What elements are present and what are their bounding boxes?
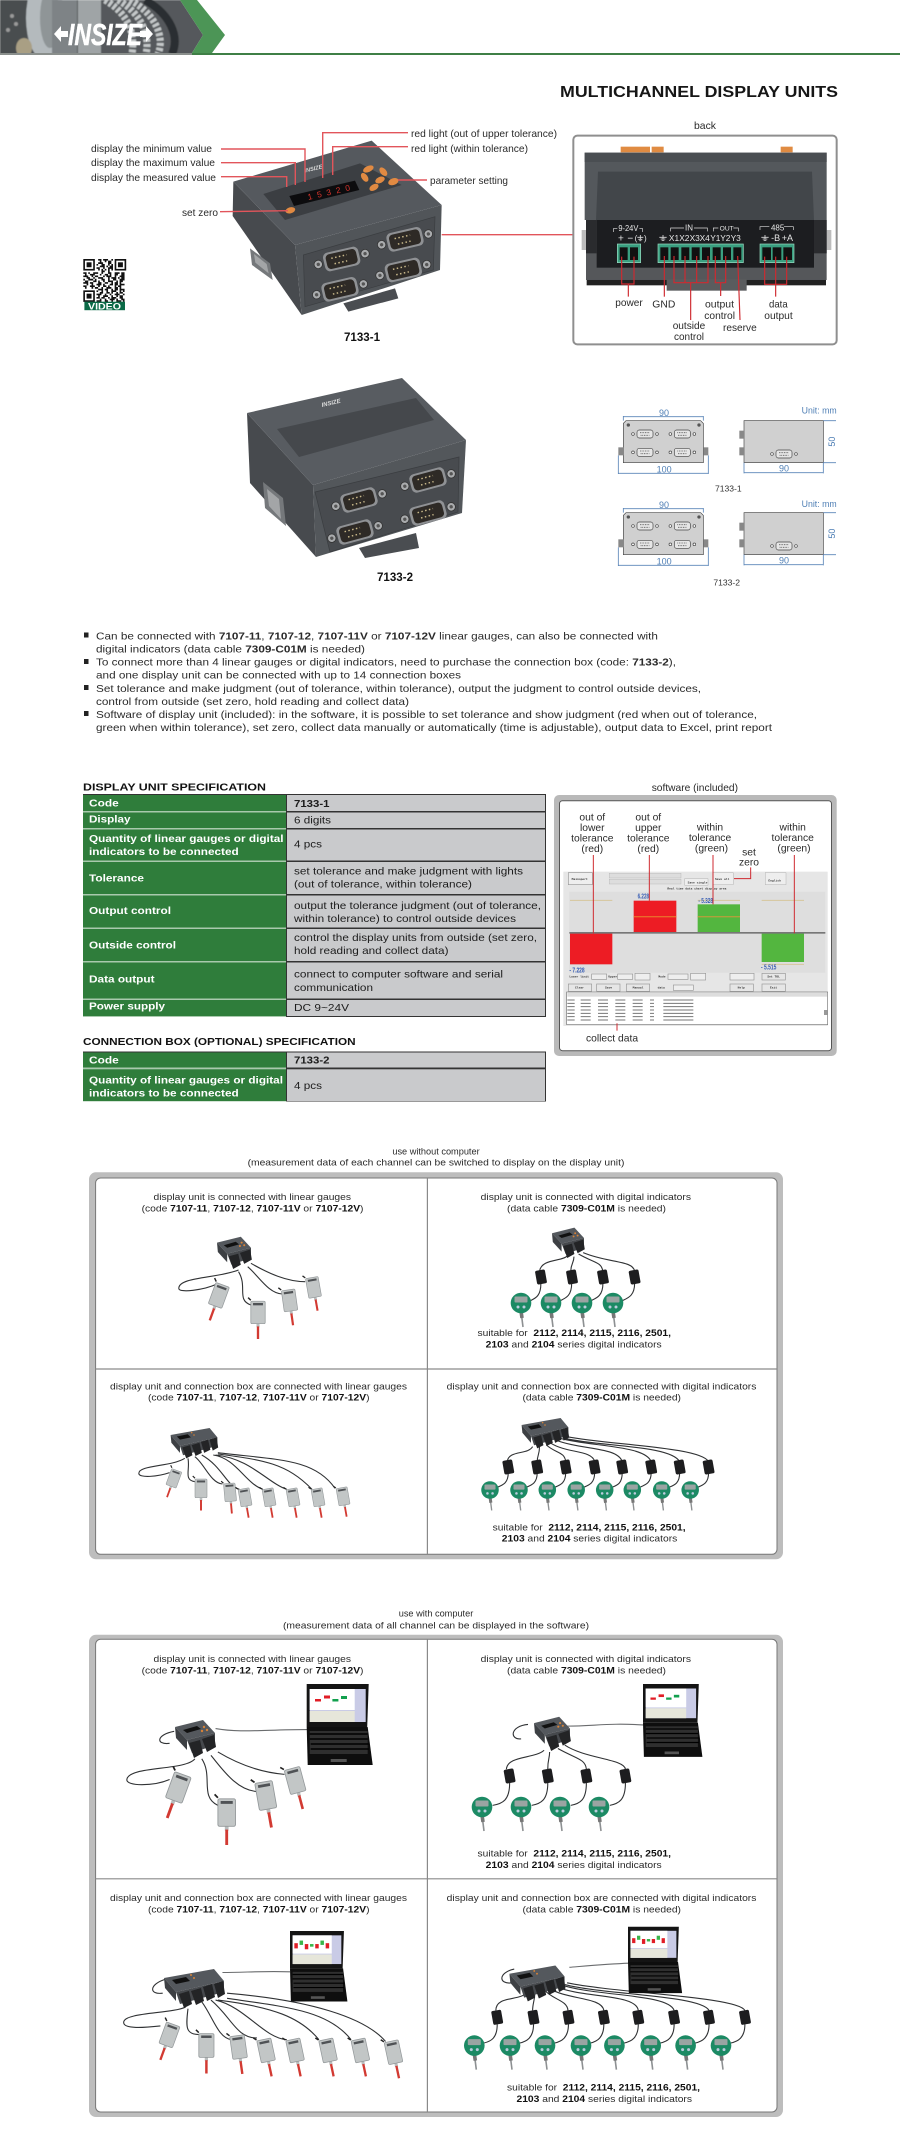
drawing set 7133-1: 50 bbox=[827, 437, 837, 447]
green rule bbox=[192, 53, 900, 55]
QR pattern bbox=[83, 260, 125, 301]
software window: Mode bbox=[658, 975, 666, 979]
software labels: (green) bbox=[777, 843, 811, 854]
row: quantity: Quantity of linear gauges or digital bbox=[89, 833, 284, 845]
callout labels for 7133-1: display the maximum value bbox=[91, 158, 215, 169]
scenario: unit and box with digital indicators: display unit and connection box are connected with digital indicators bbox=[447, 1381, 757, 1391]
scenario: computer, unit and box, linear gauges: display unit and connection box are connected with linear gauges bbox=[110, 1893, 407, 1903]
frame bbox=[89, 1635, 783, 2117]
scenario: computer, unit, digital indicators bbox=[472, 1654, 702, 1870]
drawing set 7133-2: 90 bbox=[779, 556, 789, 566]
row: output control: Output control bbox=[89, 905, 171, 917]
back view terminal labels: control bbox=[674, 332, 704, 343]
software labels: within bbox=[696, 822, 723, 833]
row: power supply: DC 9~24V bbox=[294, 1002, 349, 1014]
drawing set 7133-1: 100 bbox=[657, 464, 672, 474]
product label 7133-2: 7133-2 bbox=[377, 572, 413, 584]
scenario: unit with digital indicators: display unit is connected with digital indicators bbox=[481, 1192, 691, 1202]
connector markings: ) bbox=[644, 234, 647, 243]
row: outside control: Outside control bbox=[89, 939, 176, 951]
scenario: unit with digital indicators: 2103 and 2104 series digital indicators bbox=[486, 1339, 662, 1349]
drawing set 7133-1: 90 bbox=[779, 464, 789, 474]
callout labels for 7133-1: red light (out of upper tolerance) bbox=[411, 129, 557, 140]
connector markings: Y1 bbox=[710, 233, 721, 243]
back view terminal labels: reserve bbox=[723, 323, 757, 334]
scenario: computer, unit and box, digital indicators: display unit and connection box are connected with digital indicators bbox=[447, 1893, 757, 1903]
software labels: tolerance bbox=[772, 833, 814, 844]
software labels bbox=[571, 812, 814, 1044]
software labels: tolerance bbox=[689, 833, 731, 844]
row: code: Code bbox=[89, 1054, 119, 1066]
back view terminal labels: data bbox=[769, 300, 788, 311]
scenario: computer, unit, digital indicators: (data cable 7309-C01M is needed) bbox=[507, 1665, 666, 1675]
title: MULTICHANNEL DISPLAY UNITS bbox=[560, 84, 838, 101]
scenario: unit and box with digital indicators: suitable for 2112, 2114, 2115, 2116, 2501, bbox=[493, 1522, 686, 1532]
video tag bbox=[84, 302, 125, 310]
row: data output: Data output bbox=[89, 974, 155, 986]
software window: Save all bbox=[715, 877, 730, 881]
QR code with video tag: VIDEO bbox=[88, 302, 121, 312]
terminal blocks bbox=[617, 244, 794, 263]
drawing set 7133-2: 100 bbox=[657, 556, 672, 566]
back view terminal labels bbox=[615, 298, 793, 343]
software labels: zero bbox=[739, 857, 759, 868]
feature bullet list: Software of display unit (included): in the software, it is possible to set tolerance and show judgment (red when out of tolerance, bbox=[96, 710, 757, 721]
connector markings: 9-24V bbox=[618, 224, 639, 233]
scenario: computer, unit, digital indicators: suitable for 2112, 2114, 2115, 2116, 2501, bbox=[478, 1848, 671, 1858]
callout labels for 7133-1 bbox=[91, 129, 557, 219]
row: data output: communication bbox=[294, 982, 373, 994]
software window: 6.228 bbox=[638, 894, 649, 901]
panel: use with computer bbox=[89, 1635, 783, 2117]
row: output control: output the tolerance judgment (out of tolerance, bbox=[294, 900, 541, 912]
row: output control: within tolerance) to control outside devices bbox=[293, 913, 516, 925]
connector markings: Y3 bbox=[731, 233, 741, 243]
table: display unit specification bbox=[83, 794, 546, 1017]
software window: Save bbox=[605, 986, 612, 989]
scenario: computer, unit, digital indicators: display unit is connected with digital indicators bbox=[481, 1654, 691, 1664]
connector markings: IN bbox=[685, 224, 693, 233]
connector markings: X3 bbox=[690, 233, 700, 243]
row: tolerance: set tolerance and make judgment with lights bbox=[294, 865, 523, 877]
software window: Exit bbox=[770, 985, 777, 989]
scenario: unit with digital indicators: (data cable 7309-C01M is needed) bbox=[507, 1203, 666, 1213]
scenario: unit and box with digital indicators: 2103 and 2104 series digital indicators bbox=[502, 1534, 678, 1544]
panel: back view of display unit bbox=[573, 136, 837, 344]
row: tolerance: (out of tolerance, within tolerance) bbox=[294, 879, 472, 891]
feature bullet list: and one display unit can be connected with up to 14 connection boxes bbox=[96, 671, 461, 682]
green chevron bbox=[180, 0, 225, 53]
callout labels for 7133-1: red light (within tolerance) bbox=[411, 144, 528, 155]
scenario: computer, unit and box, linear gauges bbox=[110, 1893, 407, 2080]
frame bbox=[89, 1172, 783, 1559]
software labels: set bbox=[742, 847, 756, 858]
callout labels for 7133-1: display the measured value bbox=[91, 173, 216, 184]
scenario: computer, unit, digital indicators: 2103 and 2104 series digital indicators bbox=[486, 1860, 662, 1870]
back view terminal labels: output bbox=[764, 311, 793, 322]
dimension drawings bbox=[618, 406, 837, 587]
scenario: unit and box with digital indicators bbox=[447, 1381, 757, 1544]
row: code: 7133-2 bbox=[294, 1055, 330, 1067]
row: code: 7133-1 bbox=[294, 798, 330, 810]
drawing set 7133-1 bbox=[618, 406, 837, 493]
software labels: out of bbox=[579, 812, 605, 823]
caption: use with computer bbox=[283, 1609, 589, 1630]
scenario: unit and box with linear gauges: display unit and connection box are connected with linear gauges bbox=[110, 1381, 407, 1391]
product photo 7133-2 bbox=[247, 378, 466, 558]
product label 7133-1: 7133-1 bbox=[344, 332, 381, 344]
row: quantity: indicators to be connected bbox=[89, 846, 239, 858]
software labels: tolerance bbox=[627, 833, 670, 844]
connector markings: − bbox=[627, 234, 633, 245]
row: code bbox=[83, 1052, 545, 1068]
feature bullet list: Set tolerance and make judgment (out of tolerance, within tolerance), output the judgment to control outside devices, bbox=[96, 684, 701, 695]
software window: Lower limit bbox=[569, 975, 589, 979]
caption: use with computer: (measurement data of all channel can be displayed in the software) bbox=[283, 1620, 589, 1630]
scenario: computer, unit and box, digital indicators: (data cable 7309-C01M is needed) bbox=[522, 1905, 681, 1915]
row: tolerance bbox=[83, 862, 545, 894]
software window: - 5.328 bbox=[698, 898, 713, 905]
back view terminal labels: control bbox=[704, 311, 735, 322]
drawing set 7133-2 bbox=[618, 499, 837, 587]
software caption: software (included) bbox=[652, 783, 738, 794]
caption: use without computer: use without computer bbox=[392, 1146, 480, 1156]
back view terminal labels: power bbox=[615, 298, 643, 309]
scenario: computer, unit and box, digital indicators: suitable for 2112, 2114, 2115, 2116, 2501, bbox=[507, 2082, 700, 2092]
row: outside control bbox=[83, 929, 545, 961]
row: quantity: indicators to be connected bbox=[89, 1087, 239, 1099]
drawing set 7133-2: 7133-2 bbox=[713, 577, 740, 587]
wiring callouts bbox=[622, 256, 787, 320]
software window: Upper bbox=[608, 975, 617, 979]
software labels: (red) bbox=[581, 844, 603, 855]
row: power supply bbox=[83, 1000, 545, 1016]
table: connection box specification bbox=[83, 1052, 546, 1102]
software window: Set TOL bbox=[767, 976, 780, 979]
feature bullet list: control from outside (set zero, hold reading and collect data) bbox=[96, 697, 409, 708]
back view terminal labels: GND bbox=[652, 300, 675, 311]
panel frame bbox=[554, 795, 837, 1056]
row: display bbox=[83, 812, 545, 828]
software labels: tolerance bbox=[571, 833, 614, 844]
software window: - 5.515 bbox=[761, 964, 776, 971]
row: tolerance: Tolerance bbox=[89, 873, 144, 885]
scenario: unit with linear gauges: (code 7107-11 , 7107-12 , 7107-11V or 7107-12V ) bbox=[142, 1203, 363, 1213]
software window: OK bbox=[639, 976, 643, 979]
drawing set 7133-1: 7133-1 bbox=[715, 483, 742, 493]
software labels: upper bbox=[635, 823, 662, 834]
logo: INSIZE: INSIZE bbox=[68, 17, 143, 52]
software window: English bbox=[768, 879, 781, 883]
tolerance and zero callout lines bbox=[593, 855, 794, 1031]
software labels: lower bbox=[580, 823, 605, 834]
panel: software screenshot bbox=[554, 795, 837, 1056]
row: display: 6 digits bbox=[294, 815, 331, 827]
row: data output: connect to computer software and serial bbox=[294, 969, 503, 981]
software labels: (red) bbox=[637, 844, 659, 855]
connector markings: X2 bbox=[679, 233, 690, 243]
row: quantity bbox=[83, 830, 545, 860]
scenario: computer, unit, linear gauges bbox=[127, 1654, 373, 1845]
heading: connection box specification: CONNECTION BOX (OPTIONAL) SPECIFICATION bbox=[83, 1036, 356, 1048]
scenario: unit with linear gauges: display unit is connected with linear gauges bbox=[154, 1192, 351, 1202]
software window: Manual bbox=[633, 985, 644, 989]
connector markings: Y2 bbox=[720, 233, 731, 243]
drawing set 7133-2: 50 bbox=[827, 529, 837, 539]
scenario: computer, unit and box, linear gauges: (code 7107-11 , 7107-12 , 7107-11V or 7107-12V ) bbox=[148, 1905, 370, 1915]
row: power supply: Power supply bbox=[89, 1001, 165, 1013]
back view terminal labels: output bbox=[705, 300, 734, 311]
row: outside control: control the display units from outside (set zero, bbox=[294, 932, 537, 944]
product photo 7133-2: INSIZE bbox=[321, 399, 342, 409]
connector markings: -B bbox=[771, 233, 780, 243]
software window: Save single bbox=[688, 880, 708, 884]
drawing set 7133-2: 90 bbox=[659, 500, 669, 510]
row: output control bbox=[83, 896, 545, 928]
gear photo bbox=[0, 0, 203, 53]
row: quantity: 4 pcs bbox=[294, 1080, 322, 1092]
connector markings: X4 bbox=[700, 233, 710, 243]
product photo 7133-1: 15320 bbox=[307, 182, 351, 202]
drawing set 7133-2: Unit: mm bbox=[802, 499, 837, 509]
heading: display unit specification: DISPLAY UNIT SPECIFICATION bbox=[83, 782, 266, 794]
software window: data bbox=[658, 985, 665, 989]
row: outside control: hold reading and collect data) bbox=[294, 945, 448, 957]
callout labels for 7133-1: set zero bbox=[182, 208, 218, 219]
software window bbox=[563, 855, 828, 1031]
panel: use without computer bbox=[89, 1172, 783, 1559]
scenario: unit with linear gauges bbox=[142, 1192, 363, 1339]
product photo 7133-1 bbox=[233, 141, 442, 315]
drawing set 7133-1: Unit: mm bbox=[802, 406, 837, 416]
header banner bbox=[0, 0, 900, 60]
row: code: Code bbox=[89, 798, 119, 810]
software labels: within bbox=[779, 822, 806, 833]
scenario: computer, unit, linear gauges: display unit is connected with linear gauges bbox=[154, 1654, 351, 1664]
row: code bbox=[83, 795, 545, 811]
scenario: computer, unit and box, digital indicators: 2103 and 2104 series digital indicators bbox=[516, 2094, 692, 2104]
drawing set 7133-1: 90 bbox=[659, 408, 669, 418]
software labels: collect data bbox=[586, 1033, 638, 1044]
software window: Set ZERO bbox=[734, 976, 749, 979]
software window: Clear bbox=[575, 985, 584, 989]
scenario: unit with digital indicators bbox=[478, 1192, 691, 1349]
QR code with video tag bbox=[83, 260, 125, 312]
connector markings: X1 bbox=[669, 233, 679, 243]
scenario: computer, unit, linear gauges: (code 7107-11 , 7107-12 , 7107-11V or 7107-12V ) bbox=[142, 1665, 363, 1675]
row: quantity: Quantity of linear gauges or digital bbox=[89, 1074, 283, 1086]
software window: Real time data chart display area bbox=[667, 887, 727, 891]
caption: use without computer: (measurement data of each channel can be switched to display on the display unit) bbox=[248, 1158, 624, 1168]
software labels: (green) bbox=[695, 843, 728, 854]
connector markings: + bbox=[618, 234, 624, 245]
back view label: back bbox=[694, 121, 717, 132]
row: quantity: 4 pcs bbox=[294, 839, 322, 851]
feature bullet list: To connect more than 4 linear gauges or digital indicators, need to purchase the connection box (code: 7133-2 ), bbox=[96, 658, 676, 669]
product photo 7133-1: INSIZE bbox=[304, 164, 323, 175]
feature bullet list: Can be connected with 7107-11 , 7107-12 , 7107-11V or 7107-12V linear gauges, can also be connected with bbox=[96, 631, 658, 642]
caption: use without computer bbox=[248, 1146, 624, 1168]
connector markings: +A bbox=[782, 233, 793, 243]
software window: Help bbox=[738, 985, 745, 989]
scenario: unit and box with linear gauges bbox=[110, 1381, 407, 1519]
connector markings: OUT bbox=[720, 225, 734, 232]
software window: Mainsport bbox=[572, 877, 588, 881]
software window: - 7.228 bbox=[569, 967, 585, 974]
callout lines for 7133-1 bbox=[220, 133, 573, 235]
row: data output bbox=[83, 962, 545, 998]
feature bullet list: digital indicators (data cable 7309-C01M is needed) bbox=[96, 644, 365, 655]
back view terminal labels: outside bbox=[673, 321, 706, 332]
callout labels for 7133-1: parameter setting bbox=[430, 176, 508, 187]
caption: use with computer: use with computer bbox=[399, 1609, 473, 1619]
row: display: Display bbox=[89, 814, 131, 826]
feature bullet list: green when within tolerance), set zero, collect data manually or automatically (time is adjustable), output data to Excel, print report bbox=[96, 723, 772, 734]
connector markings: 485 bbox=[771, 223, 785, 232]
scenario: unit and box with digital indicators: (data cable 7309-C01M is needed) bbox=[522, 1393, 681, 1403]
connector markings bbox=[618, 223, 793, 245]
row: quantity bbox=[83, 1069, 545, 1101]
scenario: unit and box with linear gauges: (code 7107-11 , 7107-12 , 7107-11V or 7107-12V ) bbox=[148, 1393, 370, 1403]
software window: 200 ms bbox=[678, 986, 689, 989]
feature bullet list bbox=[84, 631, 772, 734]
software labels: out of bbox=[635, 812, 661, 823]
connector markings: ( bbox=[635, 234, 638, 243]
callout labels for 7133-1: display the minimum value bbox=[91, 144, 212, 155]
scenario: computer, unit and box, digital indicators bbox=[447, 1893, 757, 2104]
scenario: unit with digital indicators: suitable for 2112, 2114, 2115, 2116, 2501, bbox=[478, 1328, 671, 1338]
